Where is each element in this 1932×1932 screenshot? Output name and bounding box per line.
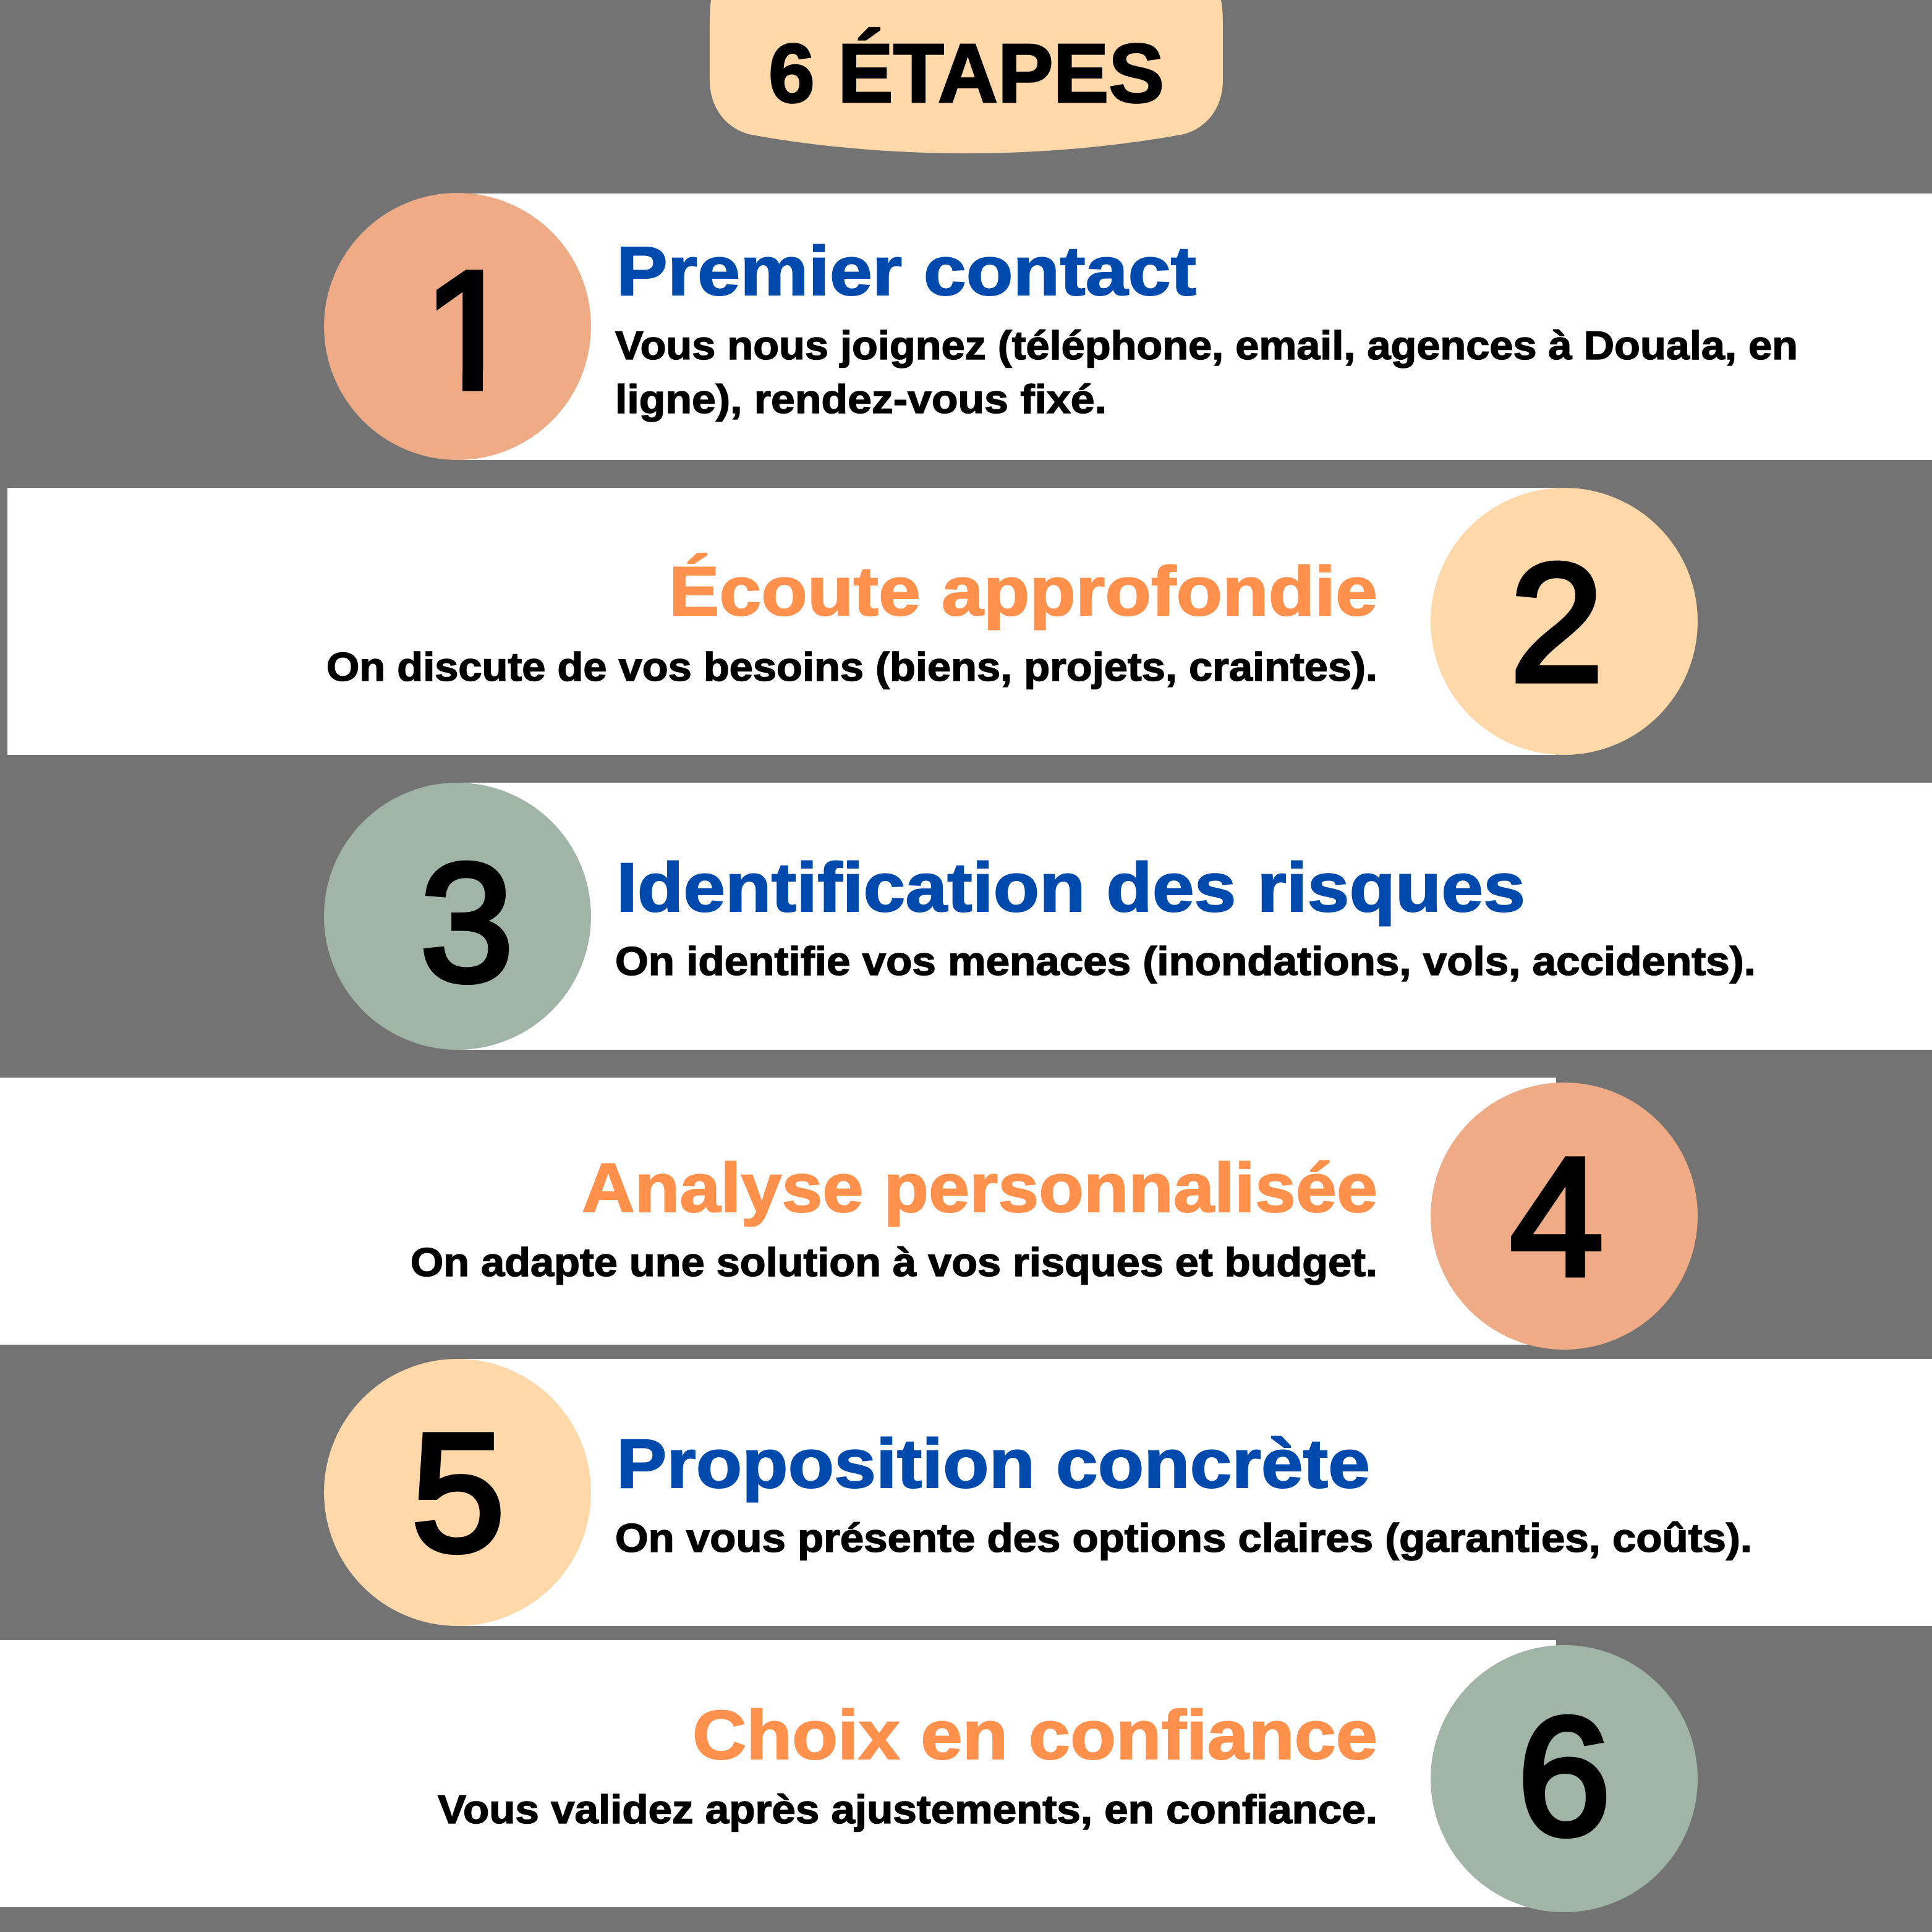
step 1 description: ligne), rendez-vous fixé. (615, 377, 1107, 422)
step 1 number circle (324, 193, 591, 460)
step 6 number circle (1431, 1645, 1698, 1912)
step 2 description: On discute de vos besoins (biens, projets, craintes). (326, 644, 1377, 689)
step 1 number circle: 1 (423, 236, 517, 424)
title banner (710, 0, 1223, 153)
step 1 panel (324, 193, 1932, 460)
step 4 description: On adapte une solution à vos risques et budget. (411, 1240, 1377, 1285)
step 5 description: On vous présente des options claires (garanties, coûts). (615, 1515, 1752, 1560)
step 4 heading: Analyse personnalisée (582, 1149, 1377, 1227)
step 4 panel (0, 1078, 1698, 1350)
step 5 panel (324, 1359, 1932, 1626)
step 1 description: Vous nous joignez (téléphone, email, agences à Douala, en (615, 323, 1798, 368)
step 3 description: On identifie vos menaces (inondations, vols, accidents). (615, 938, 1756, 984)
title banner: 6 ÉTAPES (768, 27, 1164, 120)
step 2 heading: Écoute approfondie (669, 553, 1377, 630)
step 2 panel (7, 488, 1698, 755)
step 4 number circle: 4 (1510, 1123, 1604, 1311)
step 3 heading: Identification des risques (616, 849, 1525, 926)
step 5 number circle (324, 1359, 591, 1626)
step 3 panel (324, 783, 1932, 1050)
step 5 heading: Proposition concrète (616, 1425, 1370, 1502)
step 4 number circle (1431, 1083, 1698, 1350)
step 2 number circle (1431, 488, 1698, 755)
step 6 heading: Choix en confiance (692, 1696, 1377, 1774)
step 2 number circle: 2 (1510, 529, 1604, 717)
step 6 number circle: 6 (1517, 1682, 1611, 1870)
step 6 description: Vous validez après ajustements, en confiance. (438, 1787, 1377, 1832)
step 1 heading: Premier contact (616, 232, 1196, 310)
step 5 number circle: 5 (411, 1398, 505, 1586)
step 3 number circle: 3 (420, 828, 514, 1016)
step 3 number circle (324, 783, 591, 1050)
step 1 description (615, 323, 1798, 422)
step 6 panel (0, 1640, 1698, 1912)
